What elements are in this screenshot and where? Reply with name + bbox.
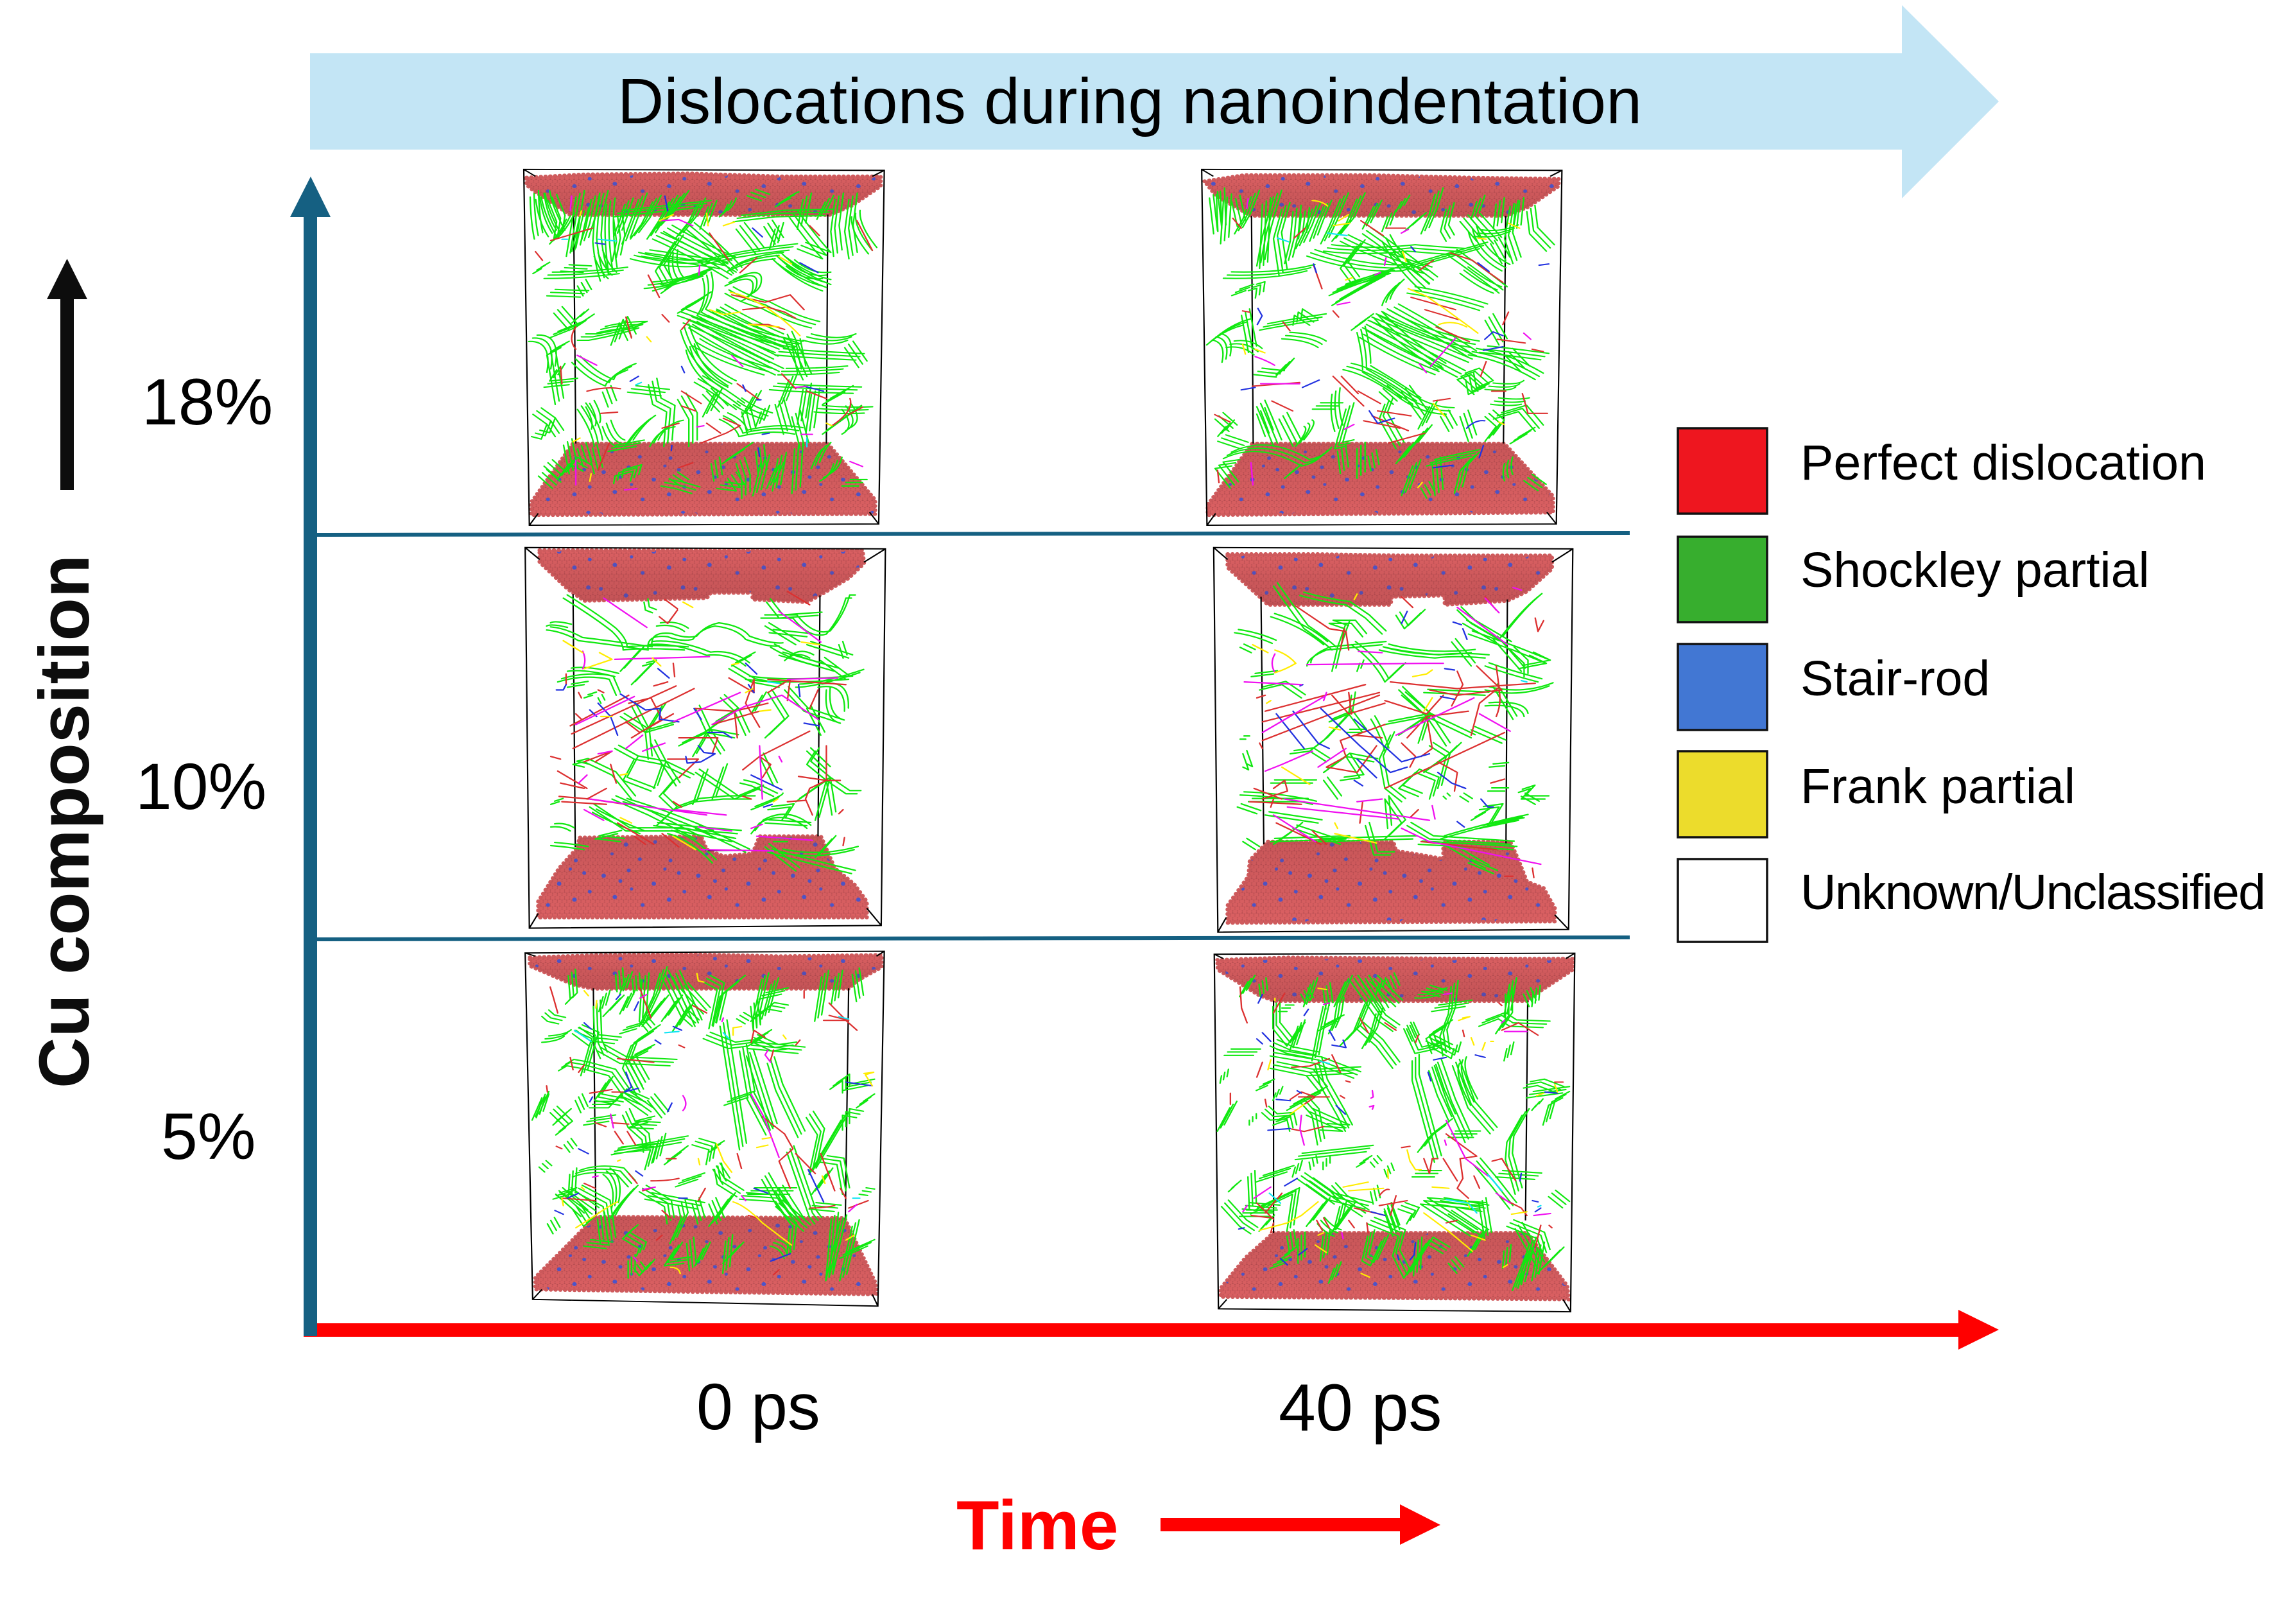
legend swatch: Shockley partial [1678,537,1767,622]
legend text: Unknown/Unclassified: Unknown/Unclassified [1800,865,2266,920]
time label 40 ps: 40 ps [1279,1371,1442,1445]
panel: 5% Cu at 0 ps [525,952,885,1306]
banner title: Dislocations during nanoindentation [617,65,1642,137]
time axis: red arrow [304,1310,1999,1350]
axis label: Cu composition: Cu composition [25,555,104,1088]
panel: 10% Cu at 0 ps [525,548,885,928]
legend [1678,428,2266,942]
row divider between 18% and 10% [317,533,1630,535]
legend text: Stair-rod: Stair-rod [1800,651,1990,706]
legend text: Shockley partial: Shockley partial [1800,543,2150,598]
legend text: Frank partial: Frank partial [1800,759,2075,814]
composition label 18%: 18% [142,365,273,439]
legend swatch: Unknown/Unclassified [1678,859,1767,942]
panel: 18% Cu at 0 ps [524,170,885,525]
composition label 5%: 5% [161,1100,255,1173]
time label 0 ps: 0 ps [696,1370,820,1443]
legend text: Perfect dislocation: Perfect dislocation [1800,435,2206,491]
row divider between 10% and 5% [317,937,1630,939]
panel: 5% Cu at 40 ps [1214,953,1575,1312]
legend swatch: Stair-rod [1678,644,1767,730]
legend swatch: Frank partial [1678,751,1767,837]
panel: 10% Cu at 40 ps [1214,548,1573,932]
panel: 18% Cu at 40 ps [1202,170,1562,525]
composition label 10%: 10% [135,750,266,823]
black composition arrow [47,259,87,490]
composition axis: blue arrow [290,177,331,1336]
banner arrow: Dislocations during nanoindentation [310,5,1999,198]
red time arrow [1161,1504,1440,1545]
legend swatch: Perfect dislocation [1678,428,1767,514]
heading: Time: Time [956,1486,1118,1565]
